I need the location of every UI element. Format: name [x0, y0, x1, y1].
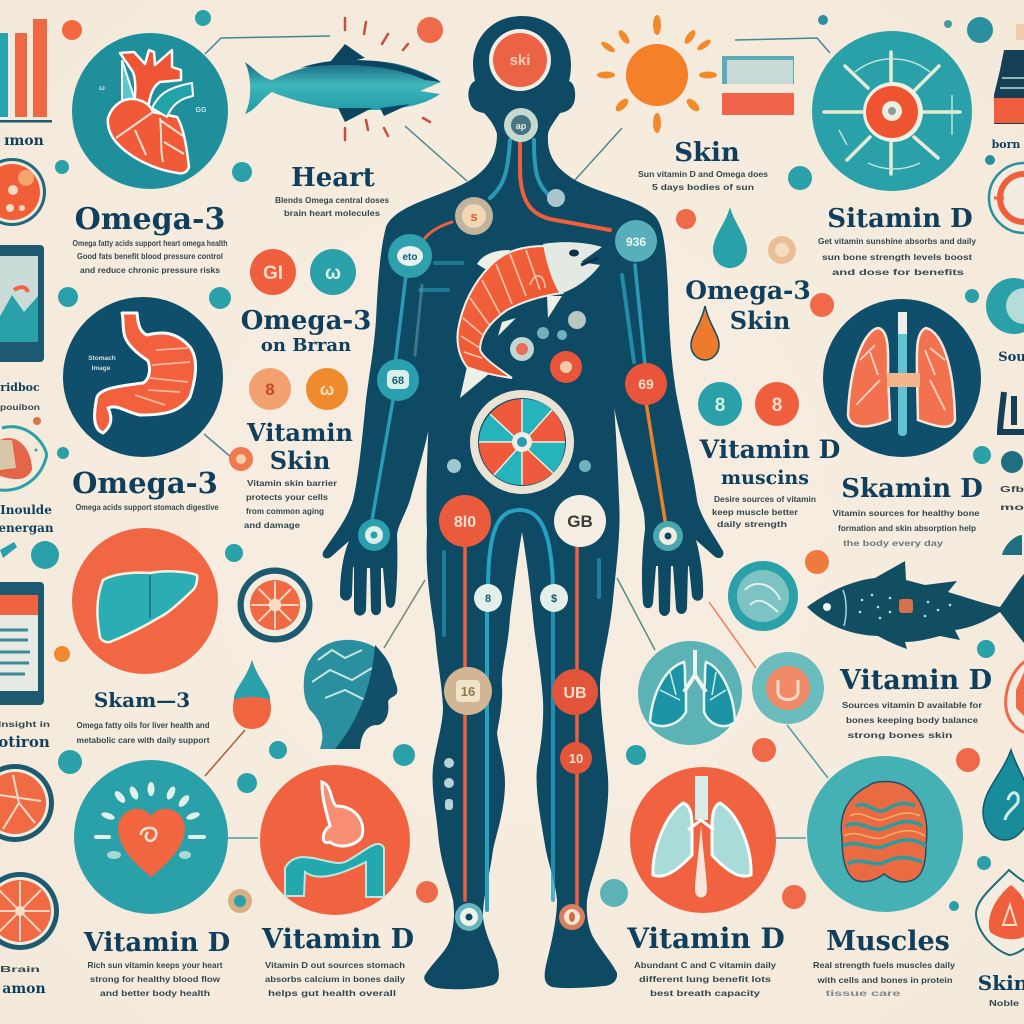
human body figure: eto	[402, 252, 418, 263]
edge shapes right bottom	[976, 658, 1024, 955]
heading: Vitamin Skin: from common aging	[246, 506, 324, 516]
panel: heart circle: ω	[99, 85, 105, 92]
heading: Skamin D: formation and skin absorption help	[838, 523, 976, 533]
neck node: ap	[516, 121, 527, 131]
heading: Omega-3 on Brain	[241, 306, 371, 356]
salmon top	[245, 18, 441, 140]
dark fish	[807, 561, 1024, 649]
shoulder nodes: s	[470, 209, 478, 224]
heading: Vitamin D Muscins: daily strength	[717, 519, 787, 529]
heading: Sitamin D	[818, 204, 976, 277]
label: Skin edge: Noble	[989, 998, 1019, 1008]
citrus: lower-left 2	[0, 872, 59, 950]
heading: Vitamin D right	[839, 665, 992, 740]
thigh nodes: 8	[485, 593, 491, 605]
label: Skin edge	[978, 971, 1024, 1008]
thigh nodes	[474, 584, 502, 612]
heading: Heart: brain heart molecules	[284, 208, 380, 218]
heading: Vitamin D center-left: Vitamin D	[261, 924, 414, 955]
human body figure: 10	[569, 751, 583, 766]
heading: Skin right	[638, 138, 768, 192]
top-left bar chart	[0, 19, 52, 122]
label: edge bottom-left	[0, 719, 50, 751]
arm nodes	[377, 359, 419, 401]
panel: stomach circle: Image	[92, 365, 111, 372]
human body figure: 936	[626, 235, 646, 249]
label: right edge: Gfb	[1000, 484, 1024, 494]
panel: lungs dark circle	[823, 299, 981, 457]
heading: Vitamin D Muscins: muscins	[721, 467, 809, 489]
heading: Skam: Omega fatty oils for liver health and	[76, 720, 210, 730]
nodes: right icons: 8	[715, 395, 725, 416]
heading: Heart: Heart	[291, 163, 375, 193]
nodes: Omega-3 on brain icons upper	[250, 249, 356, 295]
heading: Vitamin D bottom: Vitamin D	[626, 922, 785, 955]
heading: Skam	[76, 688, 210, 745]
nodes: right icons	[698, 382, 799, 426]
heading: Skin right: 5 days bodies of sun	[652, 182, 754, 192]
node: teal/orange	[752, 652, 824, 724]
connector lines	[204, 36, 830, 838]
heading: Omega-3 left: Omega fatty acids support heart omega health	[72, 238, 228, 248]
heading: Vitamin D bottom: Abundant C and C vitamin daily	[634, 960, 776, 970]
document left edge	[0, 582, 44, 705]
drop: left	[233, 660, 271, 729]
heading: Vitamin D center-left	[261, 924, 414, 998]
flag block	[722, 56, 794, 115]
heading: Vitamin Skin: Vitamin	[246, 418, 353, 447]
heading: Vitamin D bottom	[626, 922, 785, 998]
abdomen wheel	[470, 390, 574, 494]
heading: Omega-3 Skin: Omega-3	[685, 276, 811, 305]
ankle nodes	[455, 903, 483, 931]
label: mid-left edge: energan	[0, 521, 54, 535]
heading: Sitamin D: Sitamin D	[827, 204, 973, 234]
heading: Skin right: Skin	[674, 138, 740, 168]
hip nodes: 8l0	[454, 514, 476, 531]
heading: Omega-3 left: Good fats benefit blood pressure control	[77, 251, 223, 261]
panel: muscle circle	[807, 756, 963, 912]
human body figure	[323, 16, 723, 989]
arm nodes: 68	[392, 375, 404, 387]
nodes: Omega-3 on brain icons upper: ω	[325, 263, 341, 284]
heading: Skamin D: the body every day	[843, 538, 943, 548]
heading: Vitamin Skin: Vitamin skin barrier	[247, 478, 338, 488]
label: bottom-left edge	[0, 964, 46, 997]
citrus: mid	[238, 568, 312, 642]
label: right edge	[986, 278, 1024, 555]
heading: Skin right: Sun vitamin D and Omega does	[638, 169, 768, 179]
sun	[597, 15, 717, 133]
heading: Omega-3 left: Omega-3	[75, 202, 225, 237]
calf dots	[444, 758, 454, 810]
small dot cluster top-left	[55, 10, 443, 309]
label: born	[992, 138, 1020, 151]
heading: Skamin D	[832, 474, 983, 548]
label: mid-left edge: Inoulde	[0, 503, 52, 517]
heading: Vitamin Skin: and damage	[244, 520, 300, 530]
tablet left edge	[0, 245, 44, 362]
knee nodes	[444, 667, 492, 715]
head node: ski	[510, 52, 530, 69]
panel: heart circle	[72, 33, 228, 189]
panel: cell circle	[812, 31, 972, 191]
shoulder nodes	[455, 197, 493, 235]
heading: Skam: metabolic care with daily support	[76, 735, 210, 745]
heading: Muscles: with cells and bones in protein	[816, 975, 952, 985]
heading: Vitamin D left: Vitamin D	[83, 928, 230, 958]
heading: Skamin D: Skamin D	[841, 474, 983, 504]
heading: Muscles: Real strength fuels muscles daily	[813, 960, 955, 970]
heading: Omega-3 mid-left: Omega-3	[72, 466, 218, 500]
nodes: right icons: 8	[772, 395, 782, 416]
nodes: icons lower: ω	[320, 380, 334, 399]
icon: mid-left edge organ	[0, 417, 69, 569]
heading: Vitamin D left	[83, 928, 230, 998]
heading: Vitamin D left: Rich sun vitamin keeps your heart	[88, 960, 223, 970]
heading: Omega-3 Skin: Skin	[730, 306, 790, 335]
hand nodes	[358, 519, 390, 551]
hip nodes	[439, 495, 491, 547]
profile head	[304, 640, 397, 749]
dots: right top	[676, 15, 995, 464]
body silhouette	[323, 16, 723, 989]
label: mid-left edge: ridboc	[0, 381, 40, 394]
human body figure: GB	[567, 512, 593, 531]
heading: Vitamin D right: Sources vitamin D available for	[842, 700, 983, 710]
knee nodes: 16	[461, 684, 475, 699]
heading: Vitamin D bottom: different lung benefit lots	[639, 974, 771, 984]
human body figure: 69	[638, 376, 654, 392]
heading: Omega-3 left	[72, 202, 228, 275]
drop: orange	[691, 306, 719, 360]
label: mid-left edge	[0, 381, 54, 535]
drop: teal right	[713, 207, 747, 268]
heading: Muscles: tissue care	[826, 988, 901, 998]
nodes: icons lower: 8	[265, 380, 275, 399]
heading: Vitamin Skin: protects your cells	[246, 492, 328, 502]
citrus: lower-left	[0, 764, 54, 842]
node: small orange	[229, 447, 253, 471]
heading: Omega-3 mid-left: Omega acids support stomach digestive	[76, 502, 219, 512]
chest bubbles	[447, 311, 591, 473]
salmon on chest	[457, 242, 602, 398]
heading: Sitamin D: and dose for benefits	[832, 267, 964, 277]
nodes: icons lower	[249, 368, 348, 410]
human body figure: UB	[563, 685, 587, 702]
panel: heart teal circle	[74, 760, 228, 914]
dot: orange near fish	[805, 550, 995, 658]
heading: Vitamin D Muscins: Vitamin D	[699, 435, 840, 464]
panel: lungs orange circle	[630, 767, 776, 913]
panel: stomach circle: Stomach	[88, 355, 116, 362]
heading: Vitamin D Muscins: Desire sources of vitamin	[714, 494, 816, 504]
label: right edge: mo	[1000, 502, 1024, 512]
vessels	[372, 140, 665, 910]
heading: Omega-3 Skin	[685, 276, 811, 335]
heading: Muscles: Muscles	[826, 926, 950, 957]
panel: stomach circle	[63, 297, 223, 457]
heading: Vitamin D right: bones keeping body balance	[846, 715, 978, 725]
heading: Vitamin D Muscins: keep muscle better	[712, 507, 799, 517]
heading: Vitamin D center-left: Vitamin D out sources stomach	[265, 960, 405, 970]
heading: Vitamin D left: and better body health	[100, 988, 210, 998]
heading: Heart	[275, 163, 389, 218]
human body figure: $	[551, 593, 557, 605]
dots: lower right	[600, 738, 991, 911]
neck node	[504, 108, 538, 142]
heading: Omega-3 on Brain: on Brran	[261, 335, 351, 356]
head node	[489, 29, 551, 91]
heading: Skam: Skam—3	[94, 688, 190, 712]
heading: Vitamin Skin	[244, 418, 353, 530]
heading: Vitamin Skin: Skin	[270, 446, 330, 475]
heading: Vitamin D Muscins	[699, 435, 840, 529]
heading: Omega-3 on Brain: Omega-3	[241, 306, 371, 336]
heading: Sitamin D: sun bone strength levels boost	[822, 252, 972, 262]
heading: Vitamin D center-left: helps gut health overall	[268, 988, 396, 998]
panel: gut orange circle	[260, 765, 410, 915]
label: bottom-left edge: amon	[2, 981, 46, 997]
lungs teal	[638, 641, 742, 745]
heading: Vitamin D left: strong for healthy blood flow	[90, 974, 220, 984]
label: bottom-left edge: Brain	[0, 964, 40, 974]
heading: Vitamin D right: strong bones skin	[848, 730, 952, 740]
nodes: Omega-3 on brain icons upper: GI	[263, 263, 283, 284]
label: top-left: ɪmon	[4, 133, 44, 149]
cell circle	[728, 561, 798, 631]
heading: Muscles	[813, 926, 955, 998]
heading: Omega-3 left: and reduce chronic pressure risks	[80, 265, 220, 275]
label: mid-left edge: pouibon	[0, 402, 40, 412]
heading: Sitamin D: Get vitamin sunshine absorbs and daily	[818, 236, 976, 246]
heading: Vitamin D right: Vitamin D	[839, 665, 992, 696]
panel: liver circle	[72, 528, 218, 674]
heading: Skamin D: Vitamin sources for healthy bone	[832, 508, 980, 518]
heading: Heart: Blends Omega central doses	[275, 195, 389, 205]
bottle icon	[994, 24, 1024, 124]
panel: heart circle: GG	[196, 107, 207, 114]
edge icon	[989, 163, 1024, 233]
dots	[54, 544, 438, 913]
heading: Vitamin D bottom: best breath capacity	[650, 988, 760, 998]
citrus: upper left	[0, 158, 46, 226]
heading: Vitamin D center-left: absorbs calcium in bones daily	[265, 974, 405, 984]
